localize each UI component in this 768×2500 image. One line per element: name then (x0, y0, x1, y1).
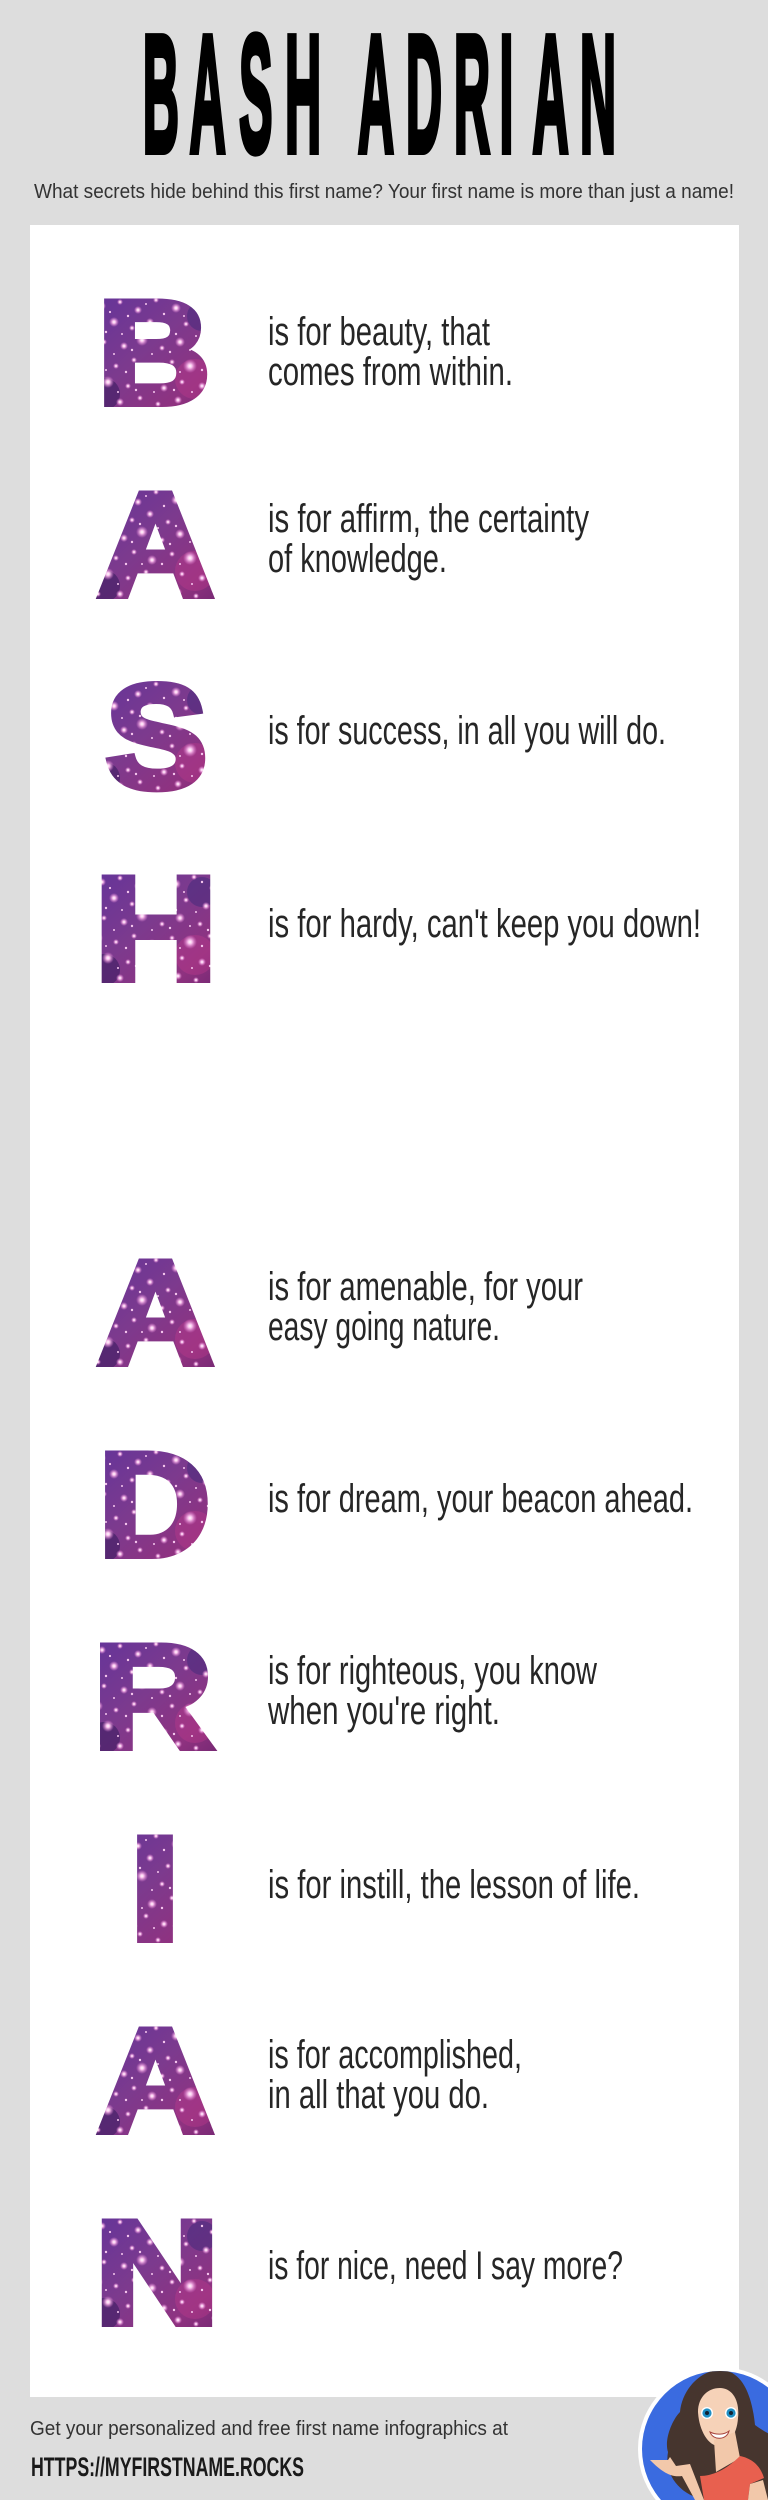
text: A meaning: easy going nature. (268, 1305, 500, 1349)
letter D: D (99, 1423, 210, 1586)
row: N (95, 2191, 623, 2354)
footer text: Get your personalized and free first name infographics at (30, 2418, 508, 2440)
row: S (106, 655, 666, 818)
text: A meaning: is for affirm, the certainty (268, 497, 589, 541)
row: H (95, 847, 701, 1010)
letter R: R (94, 1615, 212, 1778)
letter H: H (95, 847, 217, 1010)
letter B: B (98, 271, 210, 434)
letter S: S (106, 655, 207, 818)
text: I meaning: is for instill, the lesson of life. (268, 1863, 640, 1907)
footer url: HTTPS://MYFIRSTNAME.ROCKS (31, 2452, 304, 2482)
subtitle: What secrets hide behind this first name? Your first name is more than just a name! (34, 181, 734, 203)
text: A meaning (268, 497, 589, 581)
icon: avatar (638, 2367, 768, 2500)
text: A meaning: in all that you do. (268, 2073, 489, 2117)
text: A meaning: of knowledge. (268, 537, 447, 581)
letter A: A (98, 463, 213, 626)
text: R meaning (267, 1649, 597, 1733)
row: B (98, 271, 513, 434)
text: A meaning: is for amenable, for your (268, 1265, 583, 1309)
text: B meaning: comes from within. (268, 350, 513, 394)
row: A second (98, 1231, 583, 1394)
text: B meaning (268, 310, 513, 394)
text: N meaning: is for nice, need I say more? (268, 2244, 623, 2288)
letter A: A (98, 1999, 213, 2162)
text: R meaning: is for righteous, you know (268, 1649, 597, 1693)
row: A third (98, 1999, 522, 2162)
text: A meaning (268, 1265, 583, 1349)
text: A meaning: is for accomplished, (268, 2033, 522, 2077)
letter A: A (98, 1231, 213, 1394)
title: BASHADRIAN (143, 1, 616, 188)
text: R meaning: when you're right. (267, 1689, 500, 1733)
row: R (94, 1615, 597, 1778)
letter I: I (130, 1807, 180, 1970)
row: I (130, 1807, 640, 1970)
letter N: N (95, 2191, 219, 2354)
row: D (99, 1423, 693, 1586)
text: B meaning: is for beauty, that (268, 310, 490, 354)
text: A meaning (268, 2033, 522, 2117)
row: A (98, 463, 589, 626)
